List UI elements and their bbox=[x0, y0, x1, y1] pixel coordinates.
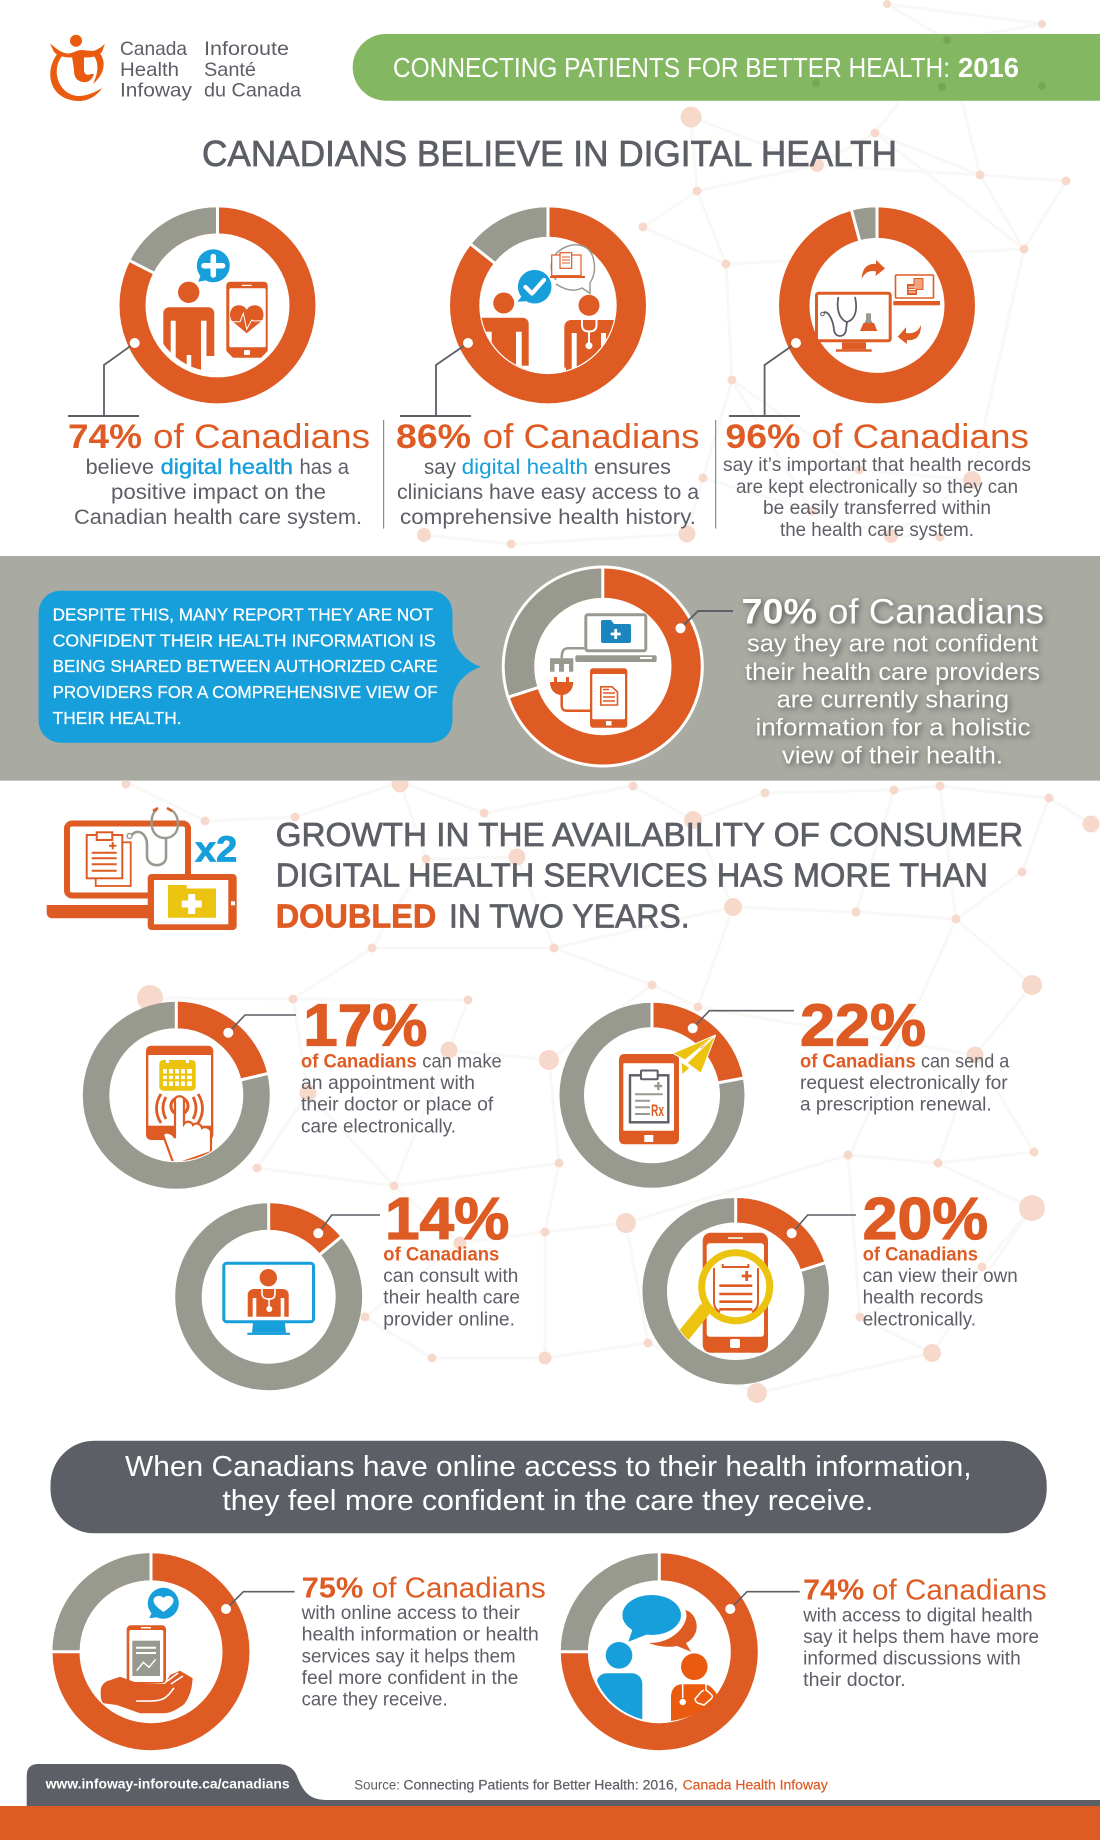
description: believe bbox=[86, 455, 154, 479]
stat heading: of Canadians bbox=[153, 418, 370, 456]
stat text: their health care providers bbox=[745, 659, 1040, 686]
header banner bbox=[353, 34, 1100, 101]
description: can view their own bbox=[863, 1266, 1018, 1287]
source line: Source: bbox=[354, 1777, 400, 1792]
icon: hand holding phone bbox=[101, 1588, 193, 1713]
stat text bbox=[742, 592, 1044, 769]
source line: Canada Health Infoway bbox=[683, 1777, 828, 1792]
icon: patient and doctor conversation bbox=[597, 1595, 717, 1721]
icon: tablet with prescription and paper plane: Rx bbox=[651, 1101, 664, 1120]
icon: laptop, stethoscope, tablet x2 bbox=[47, 808, 237, 930]
connector bbox=[725, 1592, 800, 1614]
description: comprehensive health history. bbox=[400, 505, 696, 529]
stat text: of Canadians bbox=[828, 592, 1044, 631]
panel: 14% consult online bbox=[188, 1186, 520, 1377]
panel: 86% easy access bbox=[396, 188, 700, 529]
stat text: are currently sharing bbox=[777, 687, 1009, 714]
description: care electronically. bbox=[301, 1116, 456, 1137]
heading: growth: IN TWO YEARS. bbox=[449, 898, 690, 935]
stat heading: 96% bbox=[725, 418, 800, 456]
stat text: information for a holistic bbox=[756, 715, 1030, 742]
description: the health care system. bbox=[780, 519, 974, 541]
description bbox=[74, 455, 362, 529]
icon: phone and magnifier bbox=[680, 1233, 770, 1353]
description: services say it helps them bbox=[302, 1646, 516, 1667]
description: are kept electronically so they can bbox=[736, 476, 1018, 498]
description: say it’s important that health records bbox=[723, 454, 1031, 476]
connector bbox=[221, 1592, 295, 1614]
callout bubble: CONFIDENT THEIR HEALTH INFORMATION IS bbox=[53, 631, 436, 651]
stat heading bbox=[396, 418, 700, 456]
stat number: 14% bbox=[385, 1186, 509, 1252]
stat heading: of Canadians bbox=[483, 418, 700, 456]
stat heading: 74% bbox=[68, 418, 142, 456]
description: request electronically for bbox=[800, 1073, 1008, 1094]
title: CANADIANS BELIEVE IN DIGITAL HEALTH bbox=[202, 133, 897, 174]
icon: person with phone and heart bbox=[163, 249, 268, 381]
donut chart 86% bbox=[431, 188, 665, 422]
heading: growth bbox=[276, 816, 1023, 935]
description: informed discussions with bbox=[803, 1648, 1021, 1669]
donut chart 14% bbox=[188, 1202, 349, 1377]
description: can make bbox=[422, 1051, 502, 1072]
logo wordmark: Canada bbox=[120, 38, 187, 60]
description: a prescription renewal. bbox=[800, 1095, 992, 1116]
icon: tablet, calendar, tap bbox=[146, 1046, 213, 1165]
logo wordmark: du Canada bbox=[204, 80, 301, 102]
panel: 22% prescription bbox=[572, 993, 1010, 1176]
description: digital health bbox=[462, 455, 588, 479]
connector bbox=[223, 1015, 296, 1038]
description bbox=[397, 455, 699, 529]
logo mark bbox=[50, 35, 105, 101]
description: of Canadians bbox=[301, 1051, 417, 1072]
description: say it helps them have more bbox=[803, 1627, 1039, 1648]
connector bbox=[676, 611, 733, 633]
panel: 74% positive impact bbox=[68, 191, 370, 529]
panel: 75% feel more confident bbox=[51, 1552, 546, 1737]
header banner: 2016 bbox=[958, 52, 1019, 83]
divider bbox=[715, 420, 716, 529]
description bbox=[301, 1603, 539, 1711]
stat text: 70% bbox=[742, 592, 817, 631]
donut chart 22% bbox=[572, 1001, 744, 1176]
description: can send a bbox=[921, 1051, 1010, 1072]
description: their doctor or place of bbox=[301, 1095, 494, 1116]
stat number: 17% bbox=[303, 993, 427, 1059]
connector bbox=[313, 1215, 380, 1238]
icon: tablet with prescription and paper plane bbox=[619, 1035, 716, 1144]
panel: grey band bbox=[0, 556, 1100, 781]
description: ensures bbox=[594, 455, 671, 479]
heading: growth: DOUBLED bbox=[276, 898, 436, 935]
footer tab with URL: www.infoway-inforoute.ca/canadians bbox=[45, 1776, 290, 1791]
callout bubble: BEING SHARED BETWEEN AUTHORIZED CARE bbox=[53, 656, 438, 676]
description bbox=[383, 1245, 520, 1330]
stat heading bbox=[725, 418, 1029, 456]
stat heading: of Canadians bbox=[372, 1572, 546, 1604]
description bbox=[301, 1051, 502, 1137]
stat heading: of Canadians bbox=[812, 418, 1029, 456]
description: provider online. bbox=[383, 1309, 515, 1330]
banner: online access bbox=[50, 1441, 1047, 1533]
icon: laptop, plug and phone bbox=[550, 615, 657, 728]
stat heading bbox=[302, 1572, 546, 1604]
description bbox=[802, 1605, 1039, 1691]
stat heading: 75% bbox=[302, 1572, 364, 1604]
description: of Canadians bbox=[383, 1245, 499, 1266]
heading: growth: GROWTH IN THE AVAILABILITY OF CONSUMER bbox=[276, 816, 1023, 853]
stat text: view of their health. bbox=[782, 742, 1003, 769]
description: clinicians have easy access to a bbox=[397, 480, 699, 504]
donut chart 74% bbox=[559, 1552, 744, 1737]
stat heading: of Canadians bbox=[872, 1574, 1047, 1606]
donut chart 75% bbox=[51, 1552, 236, 1737]
source line: Connecting Patients for Better Health: 2016, bbox=[403, 1777, 678, 1792]
banner: online access: When Canadians have online access to their health information, bbox=[125, 1451, 972, 1483]
donut chart 96% bbox=[776, 204, 978, 407]
description bbox=[863, 1245, 1018, 1330]
description: positive impact on the bbox=[111, 480, 326, 504]
logo wordmark: Health bbox=[120, 59, 179, 81]
callout bubble: PROVIDERS FOR A COMPREHENSIVE VIEW OF bbox=[53, 682, 438, 702]
donut chart 20% bbox=[655, 1196, 826, 1372]
description: be easily transferred within bbox=[763, 497, 991, 519]
callout bubble bbox=[39, 591, 481, 743]
connector bbox=[729, 338, 801, 417]
description: their health care bbox=[383, 1288, 520, 1309]
banner: online access: they feel more confident in the care they receive. bbox=[222, 1485, 873, 1517]
source line bbox=[354, 1777, 828, 1792]
logo bbox=[50, 35, 301, 102]
logo wordmark: Infoway bbox=[120, 80, 192, 102]
description: electronically. bbox=[863, 1309, 976, 1330]
header banner: CONNECTING PATIENTS FOR BETTER HEALTH: bbox=[393, 52, 950, 83]
description: can consult with bbox=[383, 1266, 518, 1287]
logo wordmark bbox=[120, 38, 301, 102]
icon: doctor on monitor bbox=[224, 1263, 314, 1335]
description: care they receive. bbox=[302, 1690, 448, 1711]
stat heading: 86% bbox=[396, 418, 471, 456]
description: has a bbox=[300, 455, 349, 479]
icon: patient and clinician bbox=[482, 244, 614, 371]
description: with access to digital health bbox=[802, 1605, 1033, 1626]
connector bbox=[787, 1215, 856, 1238]
panel: 20% view records bbox=[655, 1186, 1018, 1372]
description: an appointment with bbox=[301, 1073, 475, 1094]
donut chart 74% bbox=[103, 191, 332, 420]
icon: monitor, laptop, arrows bbox=[816, 260, 940, 352]
heading: growth: DIGITAL HEALTH SERVICES HAS MORE THAN bbox=[276, 857, 988, 894]
description: Canadian health care system. bbox=[74, 505, 362, 529]
description: health records bbox=[863, 1288, 983, 1309]
description: say bbox=[424, 455, 456, 479]
background network bbox=[122, 0, 1100, 1403]
description: of Canadians bbox=[863, 1245, 978, 1266]
callout bubble: THEIR HEALTH. bbox=[53, 708, 182, 728]
connector bbox=[688, 1011, 794, 1033]
description bbox=[723, 454, 1031, 541]
donut chart 70% bbox=[498, 561, 708, 772]
logo wordmark: Inforoute bbox=[204, 38, 289, 60]
description: health information or health bbox=[302, 1625, 539, 1646]
description: feel more confident in the bbox=[302, 1668, 518, 1689]
description: their doctor. bbox=[803, 1670, 906, 1691]
description: with online access to their bbox=[301, 1603, 520, 1624]
description bbox=[800, 1051, 1010, 1116]
connector bbox=[68, 338, 140, 417]
donut chart 17% bbox=[96, 1000, 269, 1176]
footer tab with URL bbox=[27, 1764, 1100, 1806]
panel: 74% informed discussions bbox=[559, 1552, 1047, 1737]
footer bbox=[0, 1764, 1100, 1840]
connector bbox=[400, 338, 473, 417]
stat number: 22% bbox=[800, 993, 926, 1059]
callout bubble: DESPITE THIS, MANY REPORT THEY ARE NOT bbox=[53, 605, 433, 625]
stat heading bbox=[68, 418, 370, 456]
panel: 96% electronic records bbox=[723, 204, 1031, 541]
description: of Canadians bbox=[800, 1051, 916, 1072]
divider bbox=[383, 420, 384, 529]
logo wordmark: Santé bbox=[204, 59, 256, 81]
icon: laptop, stethoscope, tablet x2: x2 bbox=[195, 829, 237, 870]
stat heading: 74% bbox=[803, 1574, 865, 1606]
panel: 17% appointment bbox=[96, 993, 502, 1176]
description: digital health bbox=[161, 455, 293, 479]
stat text: say they are not confident bbox=[747, 631, 1038, 658]
stat number: 20% bbox=[863, 1186, 988, 1252]
